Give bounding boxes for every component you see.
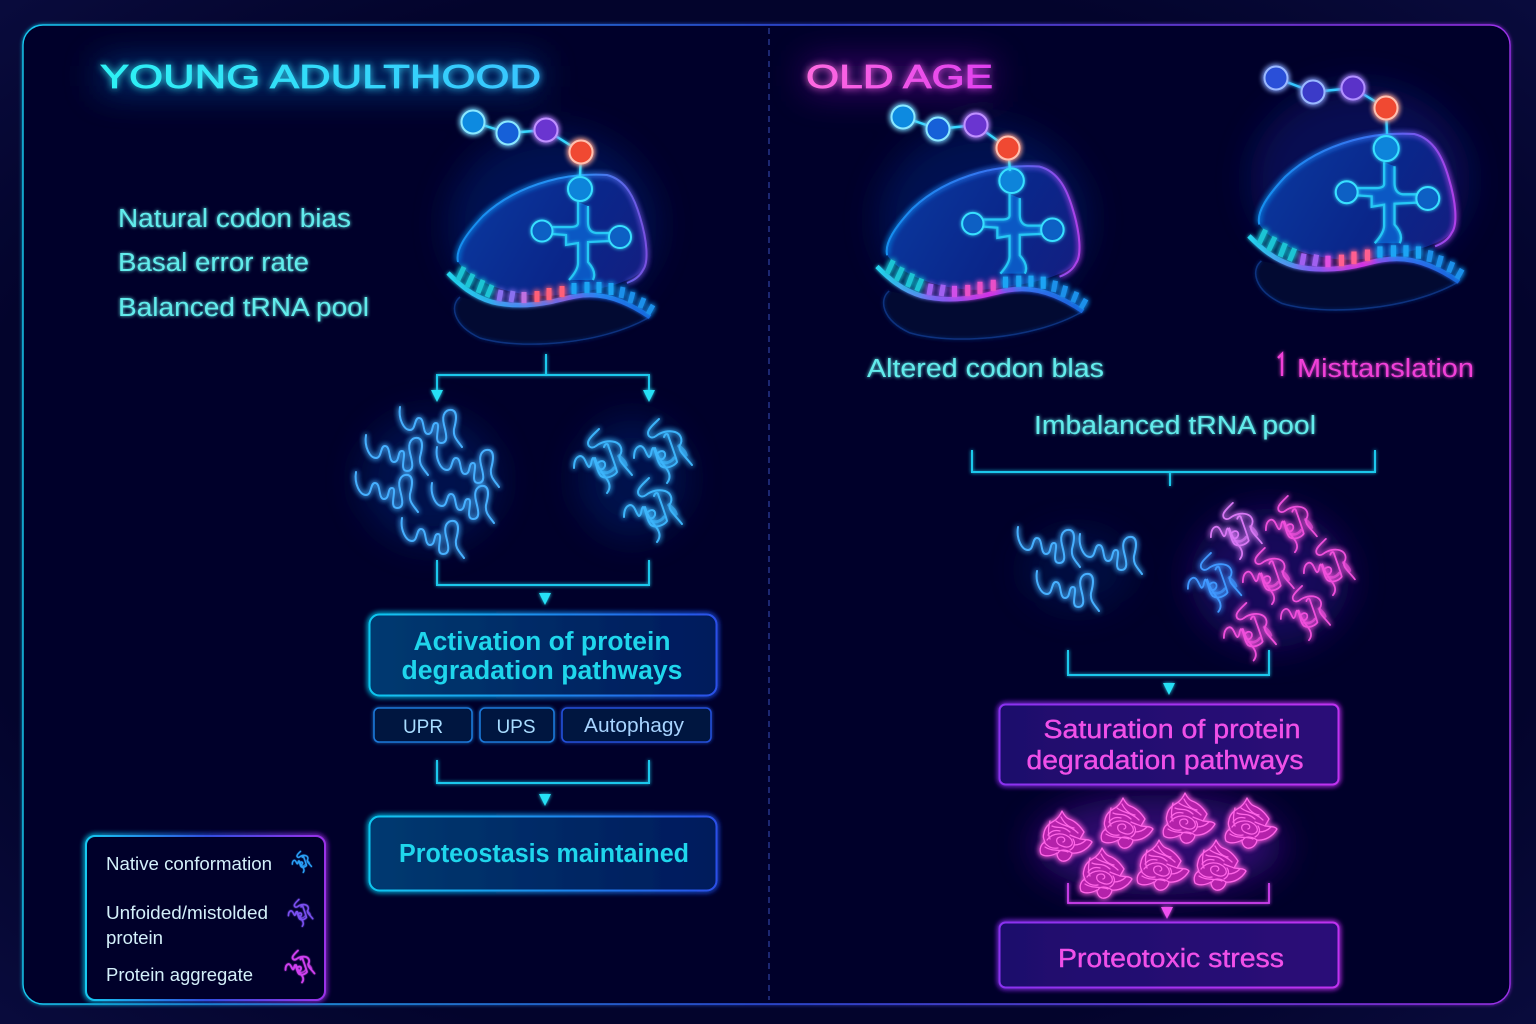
protein aggregates — [1040, 793, 1277, 898]
text block: young conditions — [118, 205, 369, 322]
unfolded proteins — [356, 407, 499, 558]
box: activation of degradation — [370, 614, 716, 696]
legend: Unfoided/mistolded — [106, 903, 268, 923]
box: proteotoxic stress: Proteotoxic stress — [1058, 945, 1284, 973]
legend: protein — [106, 928, 163, 948]
legend: Protein aggregate — [106, 965, 253, 985]
text block: young conditions: Basal error rate — [118, 249, 309, 277]
title: young adulthood: YOUNG ADULTHOOD — [100, 58, 541, 95]
label: altered codon bias: Altered codon blas — [867, 355, 1104, 383]
chip: UPS — [480, 708, 554, 742]
connector to proteostasis — [437, 760, 649, 806]
icon: ribosome old left — [877, 106, 1086, 339]
chip: Autophagy: Autophagy — [584, 715, 684, 737]
box: activation of degradation: Activation of protein — [414, 628, 670, 656]
panel: young adulthood — [86, 58, 716, 1000]
unfolded proteins — [1018, 527, 1142, 611]
label: mistranslation: Misttanslation — [1297, 355, 1474, 383]
connector to degradation box — [437, 560, 649, 605]
title: old age: OLD AGE — [806, 58, 993, 95]
text block: young conditions: Balanced tRNA pool — [118, 294, 369, 322]
peptide chain — [1264, 66, 1398, 134]
chip: UPR — [374, 708, 472, 742]
box: activation of degradation: degradation pathways — [402, 657, 682, 685]
label: imbalanced tRNA pool: Imbalanced tRNA pool — [1034, 412, 1316, 440]
flow connector: ribosome to proteins — [431, 354, 655, 402]
box: saturation: degradation pathways — [1026, 747, 1304, 775]
box: saturation: Saturation of protein — [1044, 716, 1300, 744]
misfolded proteins — [1188, 496, 1355, 660]
connector to saturation box — [1068, 650, 1269, 695]
box: saturation — [1000, 704, 1338, 784]
folded proteins — [574, 419, 692, 542]
text block: young conditions: Natural codon bias — [118, 205, 351, 233]
icon: ribosome young — [448, 110, 653, 344]
box: proteostasis maintained: Proteostasis maintained — [399, 840, 689, 868]
peptide chain — [462, 110, 592, 177]
chip: Autophagy — [562, 708, 711, 742]
pathway chips — [374, 708, 711, 742]
legend: Native conformation — [106, 854, 272, 874]
peptide chain — [892, 106, 1020, 171]
chip: UPS: UPS — [496, 717, 536, 738]
box: proteotoxic stress — [1000, 922, 1338, 988]
icon: protein aggregate — [286, 950, 314, 982]
legend — [86, 836, 325, 1000]
icon: ribosome old right — [1249, 66, 1462, 310]
connector to proteotoxic box — [1068, 883, 1269, 919]
panel: old age — [806, 58, 1474, 988]
box: proteostasis maintained — [370, 816, 716, 890]
chip: UPR: UPR — [403, 717, 443, 738]
icon: unfolded protein — [288, 899, 313, 926]
icon: native conformation — [292, 851, 311, 872]
bracket: tRNA pool — [972, 450, 1375, 486]
